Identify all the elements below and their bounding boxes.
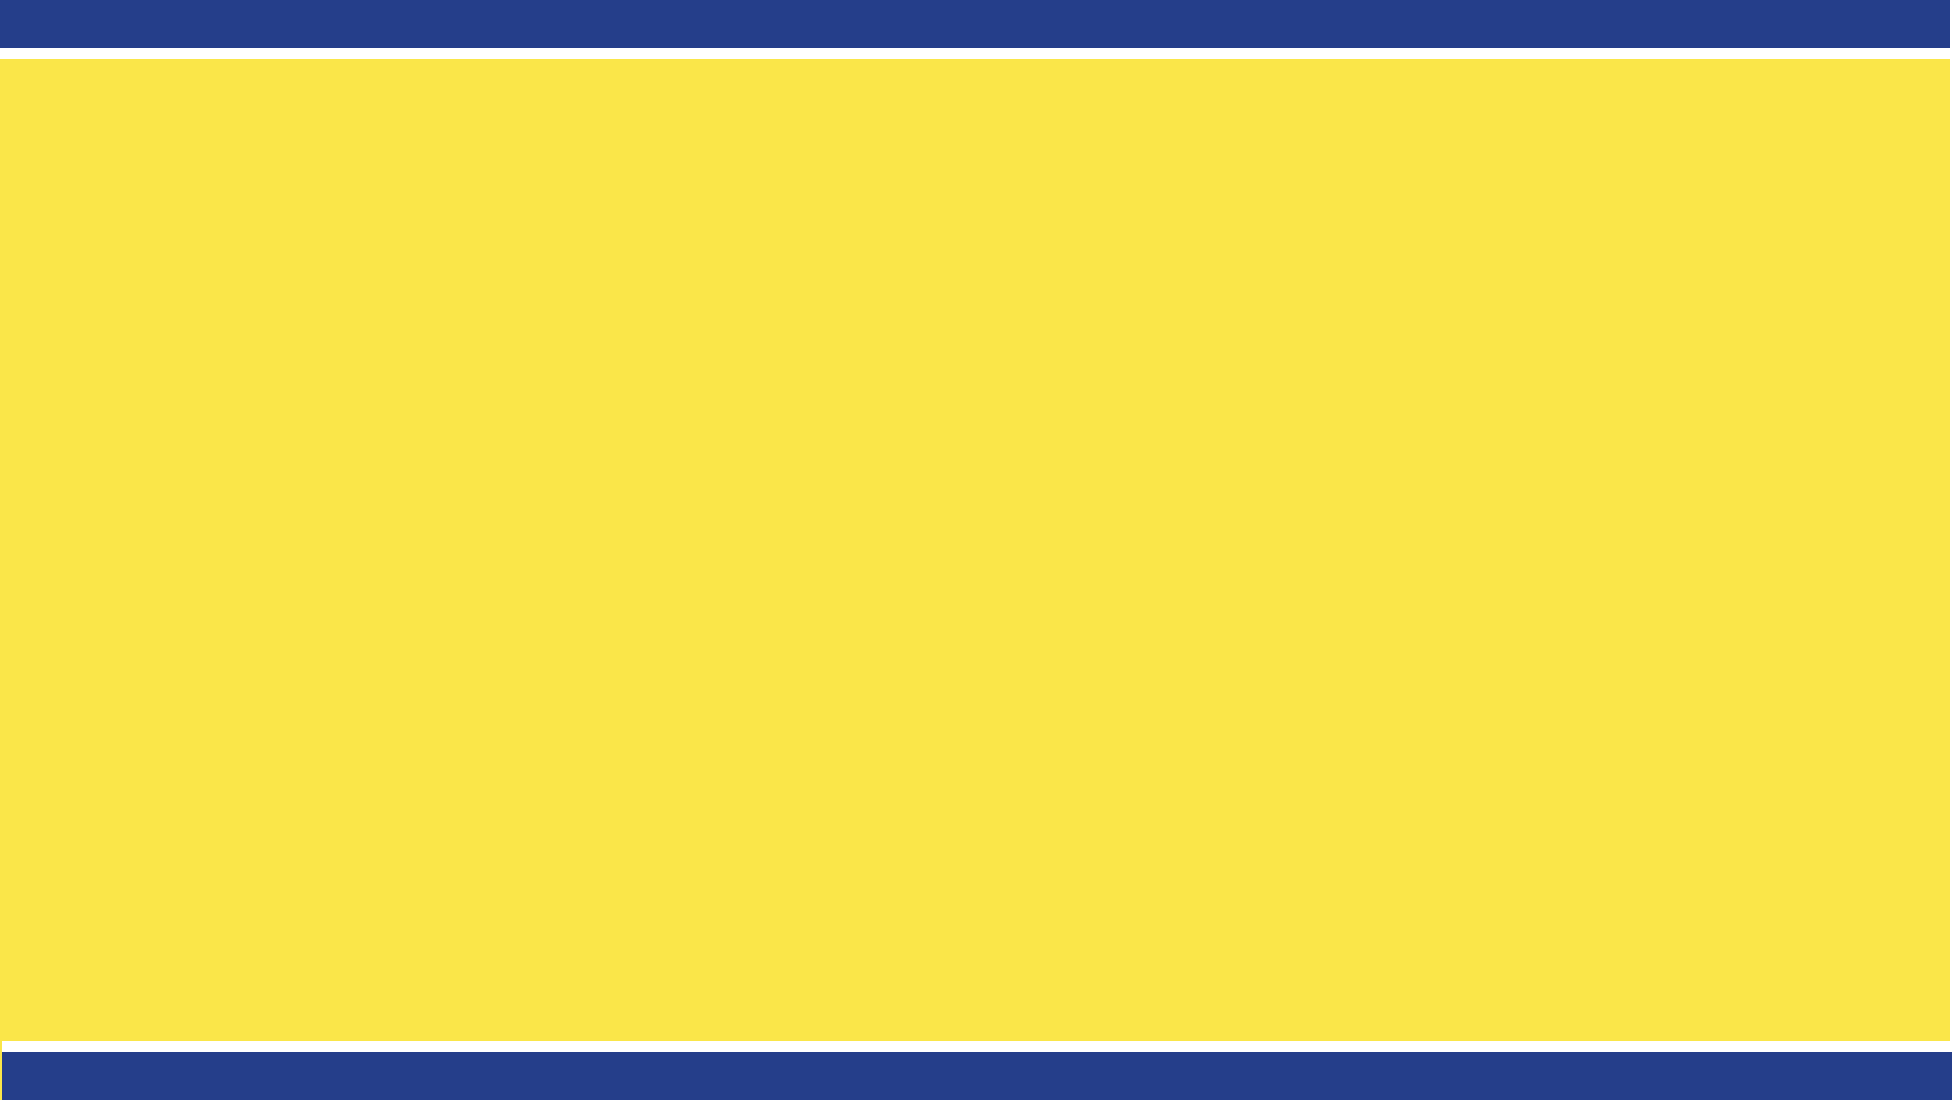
panel: bottom blue bar <box>2 1052 1952 1100</box>
panel: top blue bar <box>0 0 1950 48</box>
panel: left yellow edge strip <box>0 1041 2 1100</box>
